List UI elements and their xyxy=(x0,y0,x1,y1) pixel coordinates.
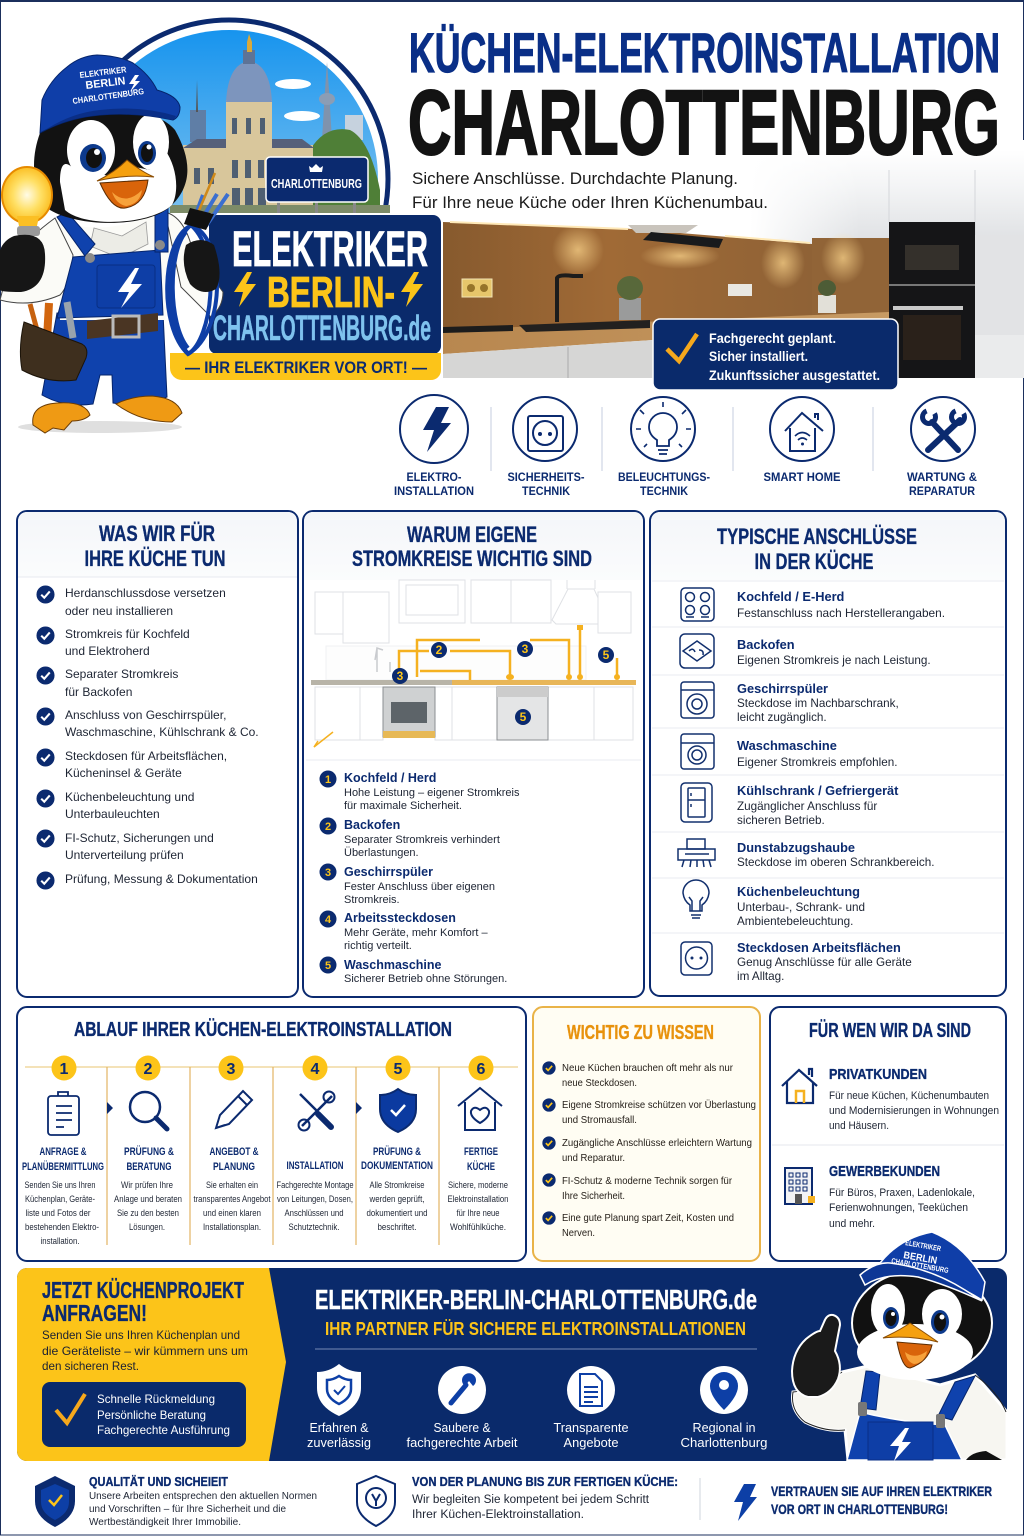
panel: für wen wir da sind xyxy=(770,1007,1006,1261)
panel: was wir für ihre küche tun xyxy=(17,511,298,997)
step 4: INSTALLATION xyxy=(286,1160,344,1172)
badge: regional: Regional in xyxy=(692,1420,756,1435)
step 3: PLANUNG xyxy=(213,1161,255,1173)
logo plate: CHARLOTTENBURG.de xyxy=(213,309,431,348)
badge: regional xyxy=(680,1366,768,1450)
subtitle: Für Ihre neue Küche oder Ihren Küchenumbau. xyxy=(412,193,768,212)
step 1: ANFRAGE & xyxy=(40,1146,87,1158)
checklist: Stromkreis für Kochfeld xyxy=(65,627,190,641)
step 3 xyxy=(194,1056,271,1232)
checklist: Kücheninsel & Geräte xyxy=(65,766,182,780)
step 4: von Leitungen, Dosen, xyxy=(277,1194,353,1204)
step 2: Anlage und beraten xyxy=(114,1194,182,1204)
legend: 3 xyxy=(325,867,331,879)
step 2: 2 xyxy=(144,1061,153,1078)
heading: ABLAUF IHRER KÜCHEN-ELEKTROINSTALLATION xyxy=(74,1018,452,1041)
kitchen wiring diagram: 3 xyxy=(397,669,404,683)
connection: Kühlschrank: sicheren Betrieb. xyxy=(737,814,825,827)
legend: 5 xyxy=(325,960,331,972)
mascot penguin with bulb and cable: CHARLOTTENBURG xyxy=(72,86,145,106)
legend: Waschmaschine xyxy=(344,958,442,972)
heading: WICHTIG ZU WISSEN xyxy=(567,1022,714,1044)
panel: wichtig zu wissen xyxy=(533,1007,760,1261)
heading: WARUM EIGENE xyxy=(407,522,537,547)
heading xyxy=(84,521,226,571)
connection: Küchenbeleuchtung: Küchenbeleuchtung xyxy=(737,884,860,899)
step 6: KÜCHE xyxy=(467,1160,495,1173)
cta heading: JETZT KÜCHENPROJEKT xyxy=(42,1277,244,1303)
checklist: Herdanschlussdose versetzen xyxy=(65,586,226,600)
checklist: Anschluss von Geschirrspüler, xyxy=(65,708,226,722)
badge: erfahren: Erfahren & xyxy=(310,1420,369,1435)
badge: regional: Charlottenburg xyxy=(680,1435,768,1450)
legend: Arbeitssteckdosen xyxy=(344,911,456,925)
connection: Geschirrspüler: Geschirrspüler xyxy=(737,681,828,696)
badge: transparente angebote: Transparente xyxy=(554,1420,628,1435)
kitchen wiring diagram: 3 xyxy=(522,642,529,656)
service: Wartung & Reparatur: REPARATUR xyxy=(909,484,975,498)
legend: Kochfeld / Herd xyxy=(344,771,436,785)
footer: vertrauen: VOR ORT IN CHARLOTTENBURG! xyxy=(771,1502,948,1517)
connection: Küchenbeleuchtung xyxy=(683,880,865,928)
connection: Backofen xyxy=(680,634,931,668)
step 6: FERTIGE xyxy=(464,1146,498,1158)
legend: Fester Anschluss über eigenen xyxy=(344,881,495,893)
logo plate: ELEKTRIKER xyxy=(232,221,428,277)
connection: Kühlschrank: Zugänglicher Anschluss für xyxy=(737,800,877,813)
connection: Kühlschrank: Kühlschrank / Gefriergerät xyxy=(737,783,899,798)
step 4: Anschlüssen und xyxy=(284,1208,344,1218)
service: Beleuchtungstechnik xyxy=(618,397,710,498)
checklist: Prüfung, Messung & Dokumentation xyxy=(65,872,258,886)
connection: Steckdosen xyxy=(681,940,912,983)
connection: Geschirrspüler: leicht zugänglich. xyxy=(737,711,827,724)
connection: Waschmaschine: Eigener Stromkreis empfohlen. xyxy=(737,756,897,769)
connection: Geschirrspüler: Steckdose im Nachbarschrank, xyxy=(737,697,899,710)
privatkunden: PRIVATKUNDEN xyxy=(829,1066,927,1083)
street sign xyxy=(266,157,368,213)
step 5: Alle Stromkreise xyxy=(370,1180,424,1190)
callout: fachgerecht: Fachgerecht geplant. xyxy=(709,331,836,346)
step 5: PRÜFUNG & xyxy=(373,1145,421,1158)
cta box xyxy=(42,1382,246,1447)
privatkunden: und Modernisierungen in Wohnungen xyxy=(829,1105,999,1117)
mascot penguin thumbs up: BERLIN xyxy=(902,1250,938,1267)
step 1: PLANÜBERMITTLUNG xyxy=(22,1160,104,1173)
step 6: für Ihre neue xyxy=(456,1208,500,1218)
step 5: DOKUMENTATION xyxy=(361,1160,433,1172)
heading: STROMKREISE WICHTIG SIND xyxy=(352,546,592,571)
street sign: CHARLOTTENBURG xyxy=(271,176,362,191)
step 2 xyxy=(114,1056,182,1232)
checklist xyxy=(36,585,259,890)
step 5: werden geprüft, xyxy=(369,1194,424,1204)
checklist: FI-Schutz, Sicherungen und xyxy=(65,831,214,845)
legend: 1 xyxy=(325,774,331,786)
badge: erfahren xyxy=(307,1364,371,1450)
privatkunden xyxy=(782,1066,999,1132)
legend: 2 xyxy=(325,821,331,833)
step 1: installation. xyxy=(40,1236,80,1246)
footer: von der planung: Ihrer Küchen-Elektroinstallation. xyxy=(412,1509,584,1521)
tips: und Reparatur. xyxy=(562,1153,625,1164)
badge: transparente angebote: Angebote xyxy=(564,1435,618,1450)
logo plate: BERLIN- xyxy=(267,268,395,317)
service: Smart Home: SMART HOME xyxy=(764,470,840,484)
step 5: beschriftet. xyxy=(378,1222,416,1232)
partner tagline: IHR PARTNER FÜR SICHERE ELEKTROINSTALLATIONEN xyxy=(325,1319,746,1339)
checklist: für Backofen xyxy=(65,685,132,699)
step 4: 4 xyxy=(311,1061,320,1078)
service: Sicherheitstechnik xyxy=(508,397,584,498)
legend: Geschirrspüler xyxy=(344,865,433,879)
panel: typische anschlüsse xyxy=(650,511,1006,996)
heading: IN DER KÜCHE xyxy=(754,549,874,574)
footer: qualität: Unsere Arbeiten entsprechen den aktuellen Normen xyxy=(89,1491,317,1502)
step 3: Sie erhalten ein xyxy=(206,1180,258,1190)
step 5: dokumentiert und xyxy=(366,1208,428,1218)
tips: Eine gute Planung spart Zeit, Kosten und xyxy=(562,1213,734,1224)
privatkunden: und Häusern. xyxy=(829,1120,889,1132)
tips xyxy=(542,1061,756,1239)
step 2: PRÜFUNG & xyxy=(124,1145,174,1158)
subtitle xyxy=(412,169,768,212)
connection: Dunstabzugshaube: Dunstabzugshaube xyxy=(737,840,855,855)
cta box: Persönliche Beratung xyxy=(97,1408,206,1422)
step 3: und einen klaren xyxy=(203,1208,261,1218)
checklist: Unterbauleuchten xyxy=(65,807,160,821)
service: Elektroinstallation: ELEKTRO- xyxy=(406,470,462,484)
connection: Steckdosen: Genug Anschlüsse für alle Geräte xyxy=(737,956,912,969)
cta box: Schnelle Rückmeldung xyxy=(97,1392,215,1406)
hero: Charlottenburg circle scene xyxy=(122,18,390,213)
step 3: Installationsplan. xyxy=(203,1222,261,1232)
legend: richtig verteilt. xyxy=(344,940,412,952)
cta text: Senden Sie uns Ihren Küchenplan und xyxy=(42,1328,240,1342)
service: Beleuchtungstechnik: BELEUCHTUNGS- xyxy=(618,470,710,484)
footer: qualität: Wertbeständigkeit Ihrer Immobilie. xyxy=(89,1517,241,1528)
badge: saubere arbeit: Saubere & xyxy=(434,1420,491,1435)
mascot penguin with bulb and cable: ELEKTRIKER xyxy=(79,64,127,80)
title xyxy=(408,21,1000,174)
connection: Steckdosen: im Alltag. xyxy=(737,970,784,983)
legend: Stromkreis. xyxy=(344,894,400,906)
badge: saubere arbeit: fachgerechte Arbeit xyxy=(406,1435,518,1450)
checklist: oder neu installieren xyxy=(65,604,173,618)
gewerbekunden: Für Büros, Praxen, Ladenlokale, xyxy=(829,1187,975,1199)
footer: qualität: und Vorschriften – für Ihre Sicherheit und die xyxy=(89,1504,286,1515)
legend: Sicherer Betrieb ohne Störungen. xyxy=(344,973,507,985)
kitchen wiring diagram: 5 xyxy=(603,648,610,662)
legend: Backofen xyxy=(344,818,400,832)
heading xyxy=(717,524,917,574)
step 1: 1 xyxy=(60,1061,69,1078)
connection: Backofen: Eigenen Stromkreis je nach Leistung. xyxy=(737,654,931,667)
connection: Kochfeld xyxy=(681,588,945,621)
panel: warum eigene stromkreise xyxy=(303,511,644,997)
legend: Separater Stromkreis verhindert xyxy=(344,834,500,846)
service: Elektroinstallation: INSTALLATION xyxy=(394,484,474,498)
kitchen hero photo xyxy=(443,140,1024,378)
subtitle: Sichere Anschlüsse. Durchdachte Planung. xyxy=(412,169,738,188)
footer: vertrauen xyxy=(734,1484,992,1521)
service: Smart Home xyxy=(764,397,840,484)
connection: Küchenbeleuchtung: Ambientebeleuchtung. xyxy=(737,915,853,928)
heading: TYPISCHE ANSCHLÜSSE xyxy=(717,524,917,549)
tips: Zugängliche Anschlüsse erleichtern Wartung xyxy=(562,1138,752,1149)
tips: neue Steckdosen. xyxy=(562,1078,637,1089)
mascot penguin thumbs up: ELEKTRIKER xyxy=(905,1238,942,1253)
step 5: 5 xyxy=(394,1061,403,1078)
step 5 xyxy=(361,1056,433,1232)
step 6: Wohlfühlküche. xyxy=(450,1222,506,1232)
connection: Küchenbeleuchtung: Unterbau-, Schrank- und xyxy=(737,901,865,914)
callout: fachgerecht xyxy=(653,319,898,390)
banner: call to action xyxy=(17,1268,1007,1461)
cta heading xyxy=(42,1277,244,1326)
service: Elektroinstallation xyxy=(394,395,474,498)
heading xyxy=(352,522,592,571)
legend: Überlastungen. xyxy=(344,847,419,859)
connection: Dunstabzugshaube xyxy=(678,839,934,869)
step 1: bestehenden Elektro- xyxy=(25,1222,99,1232)
service: Sicherheitstechnik: TECHNIK xyxy=(522,484,570,498)
step 3: transparentes Angebot xyxy=(194,1194,271,1204)
footer: qualität xyxy=(35,1474,317,1528)
step 3: ANGEBOT & xyxy=(210,1146,259,1158)
mascot penguin thumbs up: CHARLOTTENBURG xyxy=(891,1256,949,1275)
service icons row xyxy=(394,395,977,498)
step 6: Sichere, moderne xyxy=(448,1180,508,1190)
step 4 xyxy=(276,1056,354,1232)
step 1: Senden Sie uns Ihren xyxy=(24,1180,96,1190)
mascot penguin with bulb and cable xyxy=(0,55,228,433)
checklist: Waschmaschine, Kühlschrank & Co. xyxy=(65,725,259,739)
badge: saubere arbeit xyxy=(406,1366,518,1450)
service: Sicherheitstechnik: SICHERHEITS- xyxy=(508,470,584,484)
step 2: Sie zu den besten xyxy=(117,1208,179,1218)
legend xyxy=(320,770,520,985)
connection: Waschmaschine: Waschmaschine xyxy=(737,738,837,753)
step 2: Lösungen. xyxy=(129,1222,165,1232)
connection: Kühlschrank xyxy=(681,783,899,827)
checklist: Unterverteilung prüfen xyxy=(65,848,184,862)
tips: Eigene Stromkreise schützen vor Überlastung xyxy=(562,1099,756,1111)
tips: Neue Küchen brauchen oft mehr als nur xyxy=(562,1063,734,1074)
cta heading: ANFRAGEN! xyxy=(42,1300,147,1326)
footer: qualität: QUALITÄT UND SICHEIEIT xyxy=(89,1474,228,1489)
gewerbekunden: und mehr. xyxy=(829,1218,875,1230)
tips: und Stromausfall. xyxy=(562,1115,637,1126)
step 1: liste und Fotos der xyxy=(26,1208,90,1218)
step 6: Elektroinstallation xyxy=(448,1194,508,1204)
connection: Kochfeld: Kochfeld / E-Herd xyxy=(737,589,844,604)
checklist: Küchenbeleuchtung und xyxy=(65,790,194,804)
privatkunden: Für neue Küchen, Küchenumbauten xyxy=(829,1090,989,1102)
panel: ablauf xyxy=(17,1007,526,1261)
cta box: Fachgerechte Ausführung xyxy=(97,1423,230,1437)
step 2: Wir prüfen Ihre xyxy=(121,1180,173,1190)
checklist: Separater Stromkreis xyxy=(65,667,178,681)
cta text xyxy=(42,1328,248,1373)
callout: fachgerecht: Zukunftssicher ausgestattet. xyxy=(709,368,880,383)
service: Beleuchtungstechnik: TECHNIK xyxy=(640,484,688,498)
kitchen wiring diagram xyxy=(306,580,641,760)
service: Wartung & Reparatur: WARTUNG & xyxy=(907,470,977,484)
logo plate xyxy=(170,215,441,380)
tips: Nerven. xyxy=(562,1228,595,1239)
gewerbekunden: Ferienwohnungen, Teeküchen xyxy=(829,1202,968,1214)
connection: Backofen: Backofen xyxy=(737,637,795,652)
footer: von der planung: VON DER PLANUNG BIS ZUR FERTIGEN KÜCHE: xyxy=(412,1474,678,1489)
mascot penguin with bulb and cable: BERLIN xyxy=(85,75,126,92)
legend: Hohe Leistung – eigener Stromkreis xyxy=(344,787,520,799)
connection: Kochfeld: Festanschluss nach Herstellerangaben. xyxy=(737,607,945,620)
step 1 xyxy=(22,1056,104,1246)
cta text: den sicheren Rest. xyxy=(42,1359,139,1373)
checklist: Steckdosen für Arbeitsflächen, xyxy=(65,749,227,763)
gewerbekunden: GEWERBEKUNDEN xyxy=(829,1163,940,1180)
mascot penguin thumbs up xyxy=(792,1232,1007,1461)
legend: Mehr Geräte, mehr Komfort – xyxy=(344,927,489,939)
legend: für maximale Sicherheit. xyxy=(344,800,462,812)
checklist: und Elektroherd xyxy=(65,644,150,658)
tips: Ihre Sicherheit. xyxy=(562,1191,625,1202)
service: Wartung & Reparatur xyxy=(907,397,977,498)
step 4: Schutztechnik. xyxy=(288,1222,340,1232)
step 6: 6 xyxy=(477,1061,486,1078)
connection: Geschirrspüler xyxy=(681,681,899,724)
connection: Waschmaschine xyxy=(681,734,897,769)
step 2: BERATUNG xyxy=(126,1161,172,1173)
step 1: Küchenplan, Geräte- xyxy=(25,1194,95,1204)
gewerbekunden xyxy=(785,1163,975,1230)
legend: 4 xyxy=(325,914,332,926)
badge: erfahren: zuverlässig xyxy=(307,1435,371,1450)
step 4: Fachgerechte Montage xyxy=(276,1180,354,1190)
footer: von der planung xyxy=(357,1474,678,1526)
kitchen wiring diagram: 5 xyxy=(520,710,527,724)
tips: FI-Schutz & moderne Technik sorgen für xyxy=(562,1176,733,1187)
callout: fachgerecht: Sicher installiert. xyxy=(709,349,808,364)
heading: WAS WIR FÜR xyxy=(99,521,215,546)
badge: transparente angebote xyxy=(554,1366,628,1450)
logo plate: — IHR ELEKTRIKER VOR ORT! — xyxy=(185,358,427,377)
kitchen wiring diagram: 2 xyxy=(436,643,443,657)
cta text: die Geräteliste – wir kümmern uns um xyxy=(42,1344,248,1358)
heading: IHRE KÜCHE TUN xyxy=(84,546,226,571)
domain heading: ELEKTRIKER-BERLIN-CHARLOTTENBURG.de xyxy=(315,1284,757,1315)
connection: Steckdosen: Steckdosen Arbeitsflächen xyxy=(737,940,901,955)
step 3: 3 xyxy=(227,1061,236,1078)
step 6 xyxy=(448,1056,508,1232)
connection: Dunstabzugshaube: Steckdose im oberen Schrankbereich. xyxy=(737,856,934,869)
footer: von der planung: Wir begleiten Sie kompetent bei jedem Schritt xyxy=(412,1494,650,1506)
